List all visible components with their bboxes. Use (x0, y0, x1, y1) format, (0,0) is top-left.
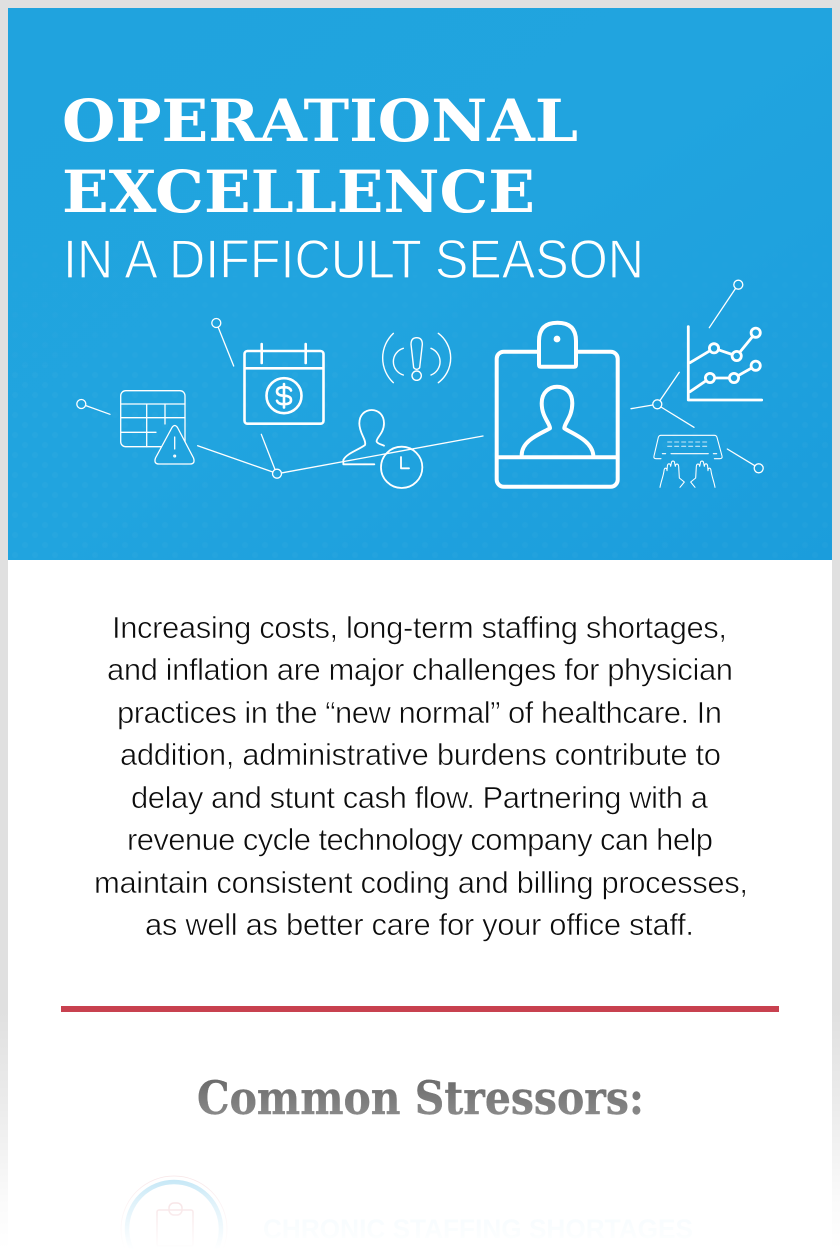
connector network right (631, 280, 763, 473)
icon: keyboard with hands (654, 435, 722, 487)
text block: introduction: and inflation are major challenges for physician (107, 652, 733, 687)
text block: introduction: maintain consistent coding and billing processes, (94, 865, 748, 900)
heading: common stressors: Common Stressors: (197, 1071, 644, 1125)
icon: connector pin left (77, 400, 110, 414)
text block: introduction: as well as better care for your office staff. (145, 907, 694, 942)
icon: line chart (688, 327, 762, 400)
title: EXCELLENCE (62, 158, 535, 226)
icon: spreadsheet with warning triangle (121, 391, 194, 464)
connector network left (198, 434, 483, 478)
icon: alert signal (383, 333, 451, 383)
title: OPERATIONAL (62, 87, 578, 155)
text block: introduction: addition, administrative burdens contribute to (120, 737, 721, 772)
text block: introduction: Increasing costs, long-term staffing shortages, (112, 610, 727, 645)
icon: faded badge in circle (121, 1176, 227, 1260)
title (62, 87, 578, 226)
icon: person with clock (343, 410, 422, 488)
subtitle: IN A DIFFICULT SEASON (63, 228, 644, 290)
divider: red rule (61, 1006, 779, 1012)
text block: introduction: delay and stunt cash flow. Partnering with a (131, 780, 709, 815)
text: faded stressor label: CHRONIC STAFFING SHORTAGES (263, 1214, 693, 1244)
panel: hero banner (8, 8, 832, 560)
bottom fade overlay (0, 1010, 840, 1250)
text block: introduction: practices in the “new normal” of healthcare. In (117, 695, 722, 730)
text block: introduction: revenue cycle technology company can help (127, 822, 713, 857)
icon: calendar with dollar sign (244, 344, 324, 424)
icon: ID badge (497, 323, 618, 487)
text block: introduction (94, 610, 748, 942)
icon: connector pin top (212, 318, 234, 366)
